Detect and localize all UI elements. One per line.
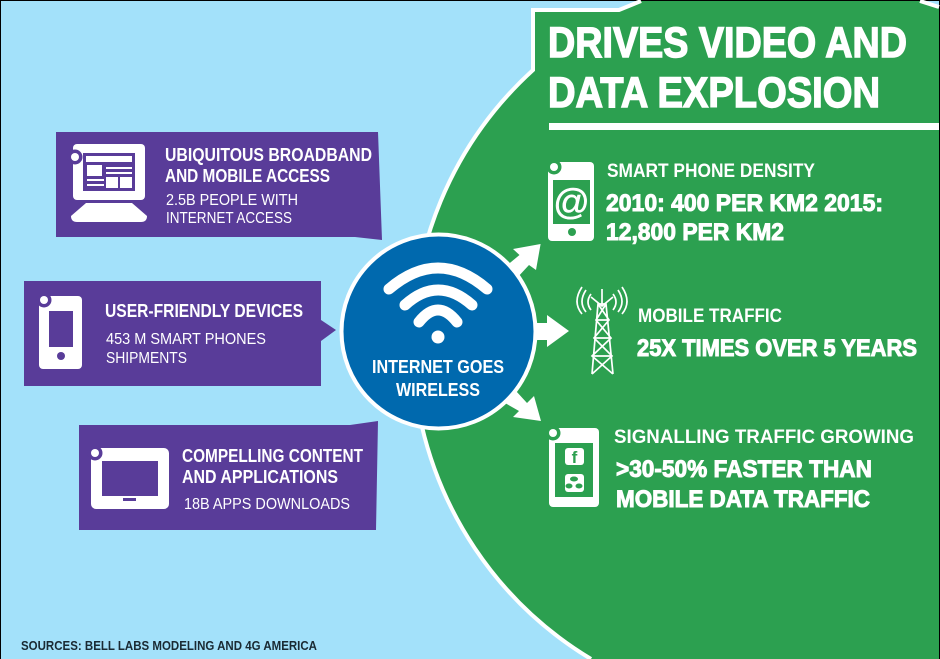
text: smart phone density: 2010: 400 PER KM2 2015: bbox=[606, 190, 883, 217]
icon: tablet with social apps: f bbox=[572, 448, 578, 467]
arrow: up right bbox=[505, 244, 541, 279]
heading: drives video and data explosion bbox=[548, 19, 939, 130]
text: mobile traffic: MOBILE TRAFFIC bbox=[638, 306, 782, 327]
text: internet goes wireless bbox=[372, 357, 504, 400]
icon: tablet bbox=[88, 446, 169, 509]
text: devices: SHIPMENTS bbox=[106, 350, 187, 367]
text: content: 18B APPS DOWNLOADS bbox=[184, 496, 350, 513]
text: devices: USER-FRIENDLY DEVICES bbox=[105, 301, 303, 321]
text: signalling traffic: SIGNALLING TRAFFIC GROWING bbox=[614, 427, 914, 448]
text: broadband: AND MOBILE ACCESS bbox=[165, 166, 330, 186]
heading: drives video and data explosion: DATA EXPLOSION bbox=[548, 69, 880, 117]
icon: cell tower bbox=[577, 287, 627, 374]
icon: smart phone bbox=[36, 292, 82, 369]
text: broadband: UBIQUITOUS BROADBAND bbox=[165, 145, 372, 165]
text: devices bbox=[105, 301, 303, 367]
panel: green explosion circle bbox=[412, 1, 939, 659]
icon: phone with at sign bbox=[546, 160, 594, 241]
text: internet goes wireless: INTERNET GOES bbox=[372, 357, 504, 377]
panel: user-friendly devices bbox=[24, 281, 336, 386]
icon: phone with at sign: @ bbox=[553, 181, 590, 222]
text: devices: 453 M SMART PHONES bbox=[106, 331, 266, 348]
text: sources: SOURCES: BELL LABS MODELING AND 4G AMERICA bbox=[21, 638, 318, 653]
text: signalling traffic: MOBILE DATA TRAFFIC bbox=[616, 486, 870, 513]
panel: internet goes wireless hub bbox=[342, 234, 536, 428]
text: smart phone density: SMART PHONE DENSITY bbox=[607, 161, 815, 182]
text: signalling traffic bbox=[614, 427, 914, 513]
text: internet goes wireless: WIRELESS bbox=[396, 380, 480, 400]
text: broadband: INTERNET ACCESS bbox=[166, 210, 292, 227]
text: smart phone density bbox=[606, 161, 883, 246]
text: broadband bbox=[165, 145, 372, 227]
arrow: down right bbox=[505, 391, 541, 421]
text: broadband: 2.5B PEOPLE WITH bbox=[166, 192, 298, 209]
text: signalling traffic: >30-50% FASTER THAN bbox=[616, 456, 872, 483]
panel: ubiquitous broadband bbox=[56, 132, 382, 240]
text: smart phone density: 12,800 PER KM2 bbox=[606, 219, 784, 246]
icon: desktop computer bbox=[68, 144, 147, 222]
text: mobile traffic bbox=[637, 306, 917, 362]
text: mobile traffic: 25X TIMES OVER 5 YEARS bbox=[637, 335, 917, 362]
panel: compelling content bbox=[79, 421, 378, 530]
text: content bbox=[182, 446, 363, 513]
icon: wifi bbox=[389, 268, 487, 344]
icon: tablet with social apps bbox=[546, 426, 599, 507]
arrow: right bbox=[530, 315, 569, 347]
text: content: AND APPLICATIONS bbox=[182, 467, 338, 487]
text: content: COMPELLING CONTENT bbox=[182, 446, 363, 466]
